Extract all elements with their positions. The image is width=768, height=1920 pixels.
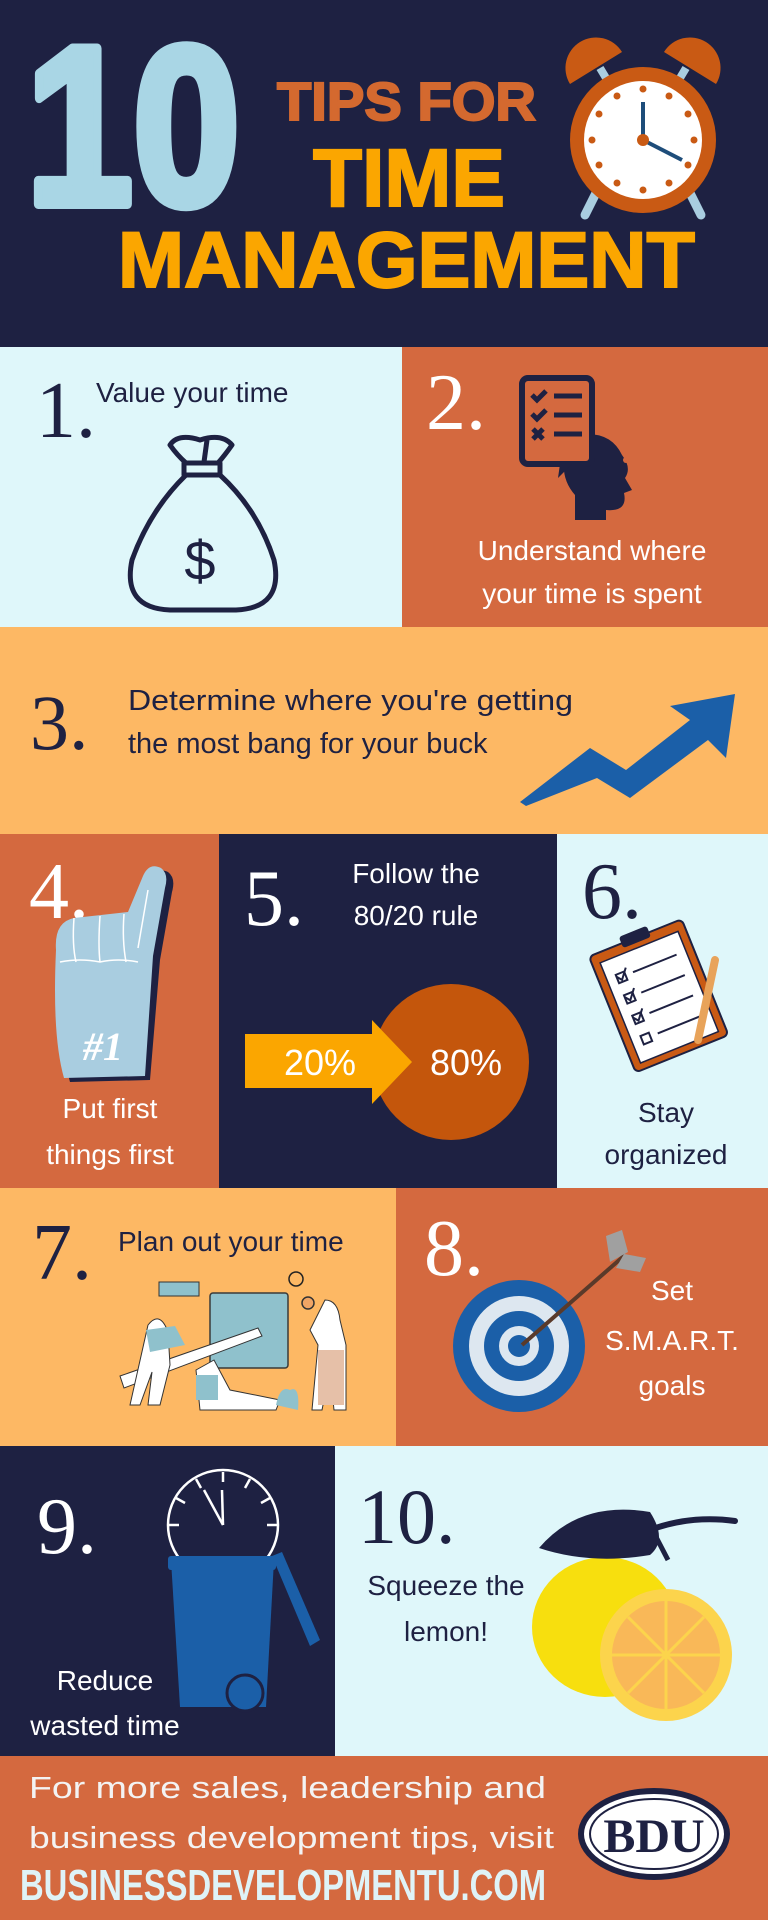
panel 2: understand where your time is spent [402,347,768,627]
chart: 20% arrow to 80% circle: 80% [430,1042,502,1083]
panel 6: stay organized: 6. [582,848,642,936]
panel 8: set smart goals: 8. [424,1205,484,1293]
big number 10: 10 [26,0,240,252]
panel 9: reduce wasted time: Reduce [57,1665,153,1696]
panel 3: bang for your buck [0,627,768,834]
panel 3: bang for your buck: Determine where you're getting [128,685,573,717]
panel 8: set smart goals: S.M.A.R.T. [605,1325,739,1356]
icon: zigzag growth arrow [520,694,735,806]
panel 8: set smart goals [396,1188,768,1446]
logo: BDU: BDU [603,1810,705,1863]
panel 10: squeeze the lemon: 10. [358,1473,456,1560]
panel 7: plan out your time: 7. [32,1209,92,1297]
icon: money bag: $ [184,529,216,592]
footer: business development tips, visit [29,1820,554,1855]
panel 1: value your time [0,347,402,627]
title: management: MANAGEMENT [118,215,695,304]
panel 2: understand where your time is spent: Understand where [478,535,706,566]
footer: For more sales, leadership and [29,1770,546,1805]
panel 3: bang for your buck: the most bang for your buck [128,728,488,760]
header panel [0,0,768,347]
panel 9: reduce wasted time: 9. [37,1483,97,1571]
panel 6: stay organized: Stay [638,1097,694,1128]
panel 4: put first things first [0,834,219,1188]
panel 1: value your time: 1. [36,367,96,455]
panel 10: squeeze the lemon: lemon! [404,1616,488,1647]
panel 9: reduce wasted time: wasted time [29,1710,180,1741]
panel 1: value your time: Value your time [96,377,288,408]
title: tips for: TIPS FOR [277,72,536,132]
illustration: people planning [120,1272,346,1410]
panel 2: understand where your time is spent: your time is spent [482,578,702,609]
panel 5: follow the 80/20 rule: 5. [244,855,304,943]
panel 10: squeeze the lemon: Squeeze the [367,1570,525,1601]
panel 4: put first things first: 4. [29,848,89,936]
panel 5: follow the 80/20 rule: 80/20 rule [354,900,478,931]
panel 4: put first things first: Put first [63,1093,158,1124]
panel 7: plan out your time [0,1188,396,1446]
icon: money bag [130,437,276,610]
footer: BUSINESSDEVELOPMENTU.COM [20,1861,546,1910]
panel 2: understand where your time is spent: 2. [426,359,486,447]
panel 5: follow the 80/20 rule: Follow the [352,858,480,889]
chart: 20% arrow to 80% circle [245,984,529,1140]
icon: clock over trash can [168,1470,320,1711]
panel 5: follow the 80/20 rule [219,834,557,1188]
panel 7: plan out your time: Plan out your time [118,1226,344,1257]
panel 10: squeeze the lemon [335,1446,768,1756]
icon: foam finger: #1 [82,1024,123,1069]
chart: 20% arrow to 80% circle: 20% [284,1042,356,1083]
icon: foam finger [55,866,173,1082]
icon: checklist and head [522,378,632,520]
icon: clipboard [586,913,728,1072]
panel 9: reduce wasted time [0,1446,335,1756]
panel 8: set smart goals: Set [651,1275,693,1306]
footer [0,1756,768,1920]
panel 3: bang for your buck: 3. [30,679,88,766]
icon: alarm clock [565,37,721,215]
panel 6: stay organized: organized [605,1139,727,1170]
panel 4: put first things first: things first [46,1139,174,1170]
logo: BDU [578,1788,730,1880]
panel 6: stay organized [557,834,768,1188]
title: time: TIME [313,133,505,224]
panel 8: set smart goals: goals [639,1370,705,1401]
icon: lemon with slice [532,1510,735,1721]
icon: target with arrow [453,1230,646,1412]
